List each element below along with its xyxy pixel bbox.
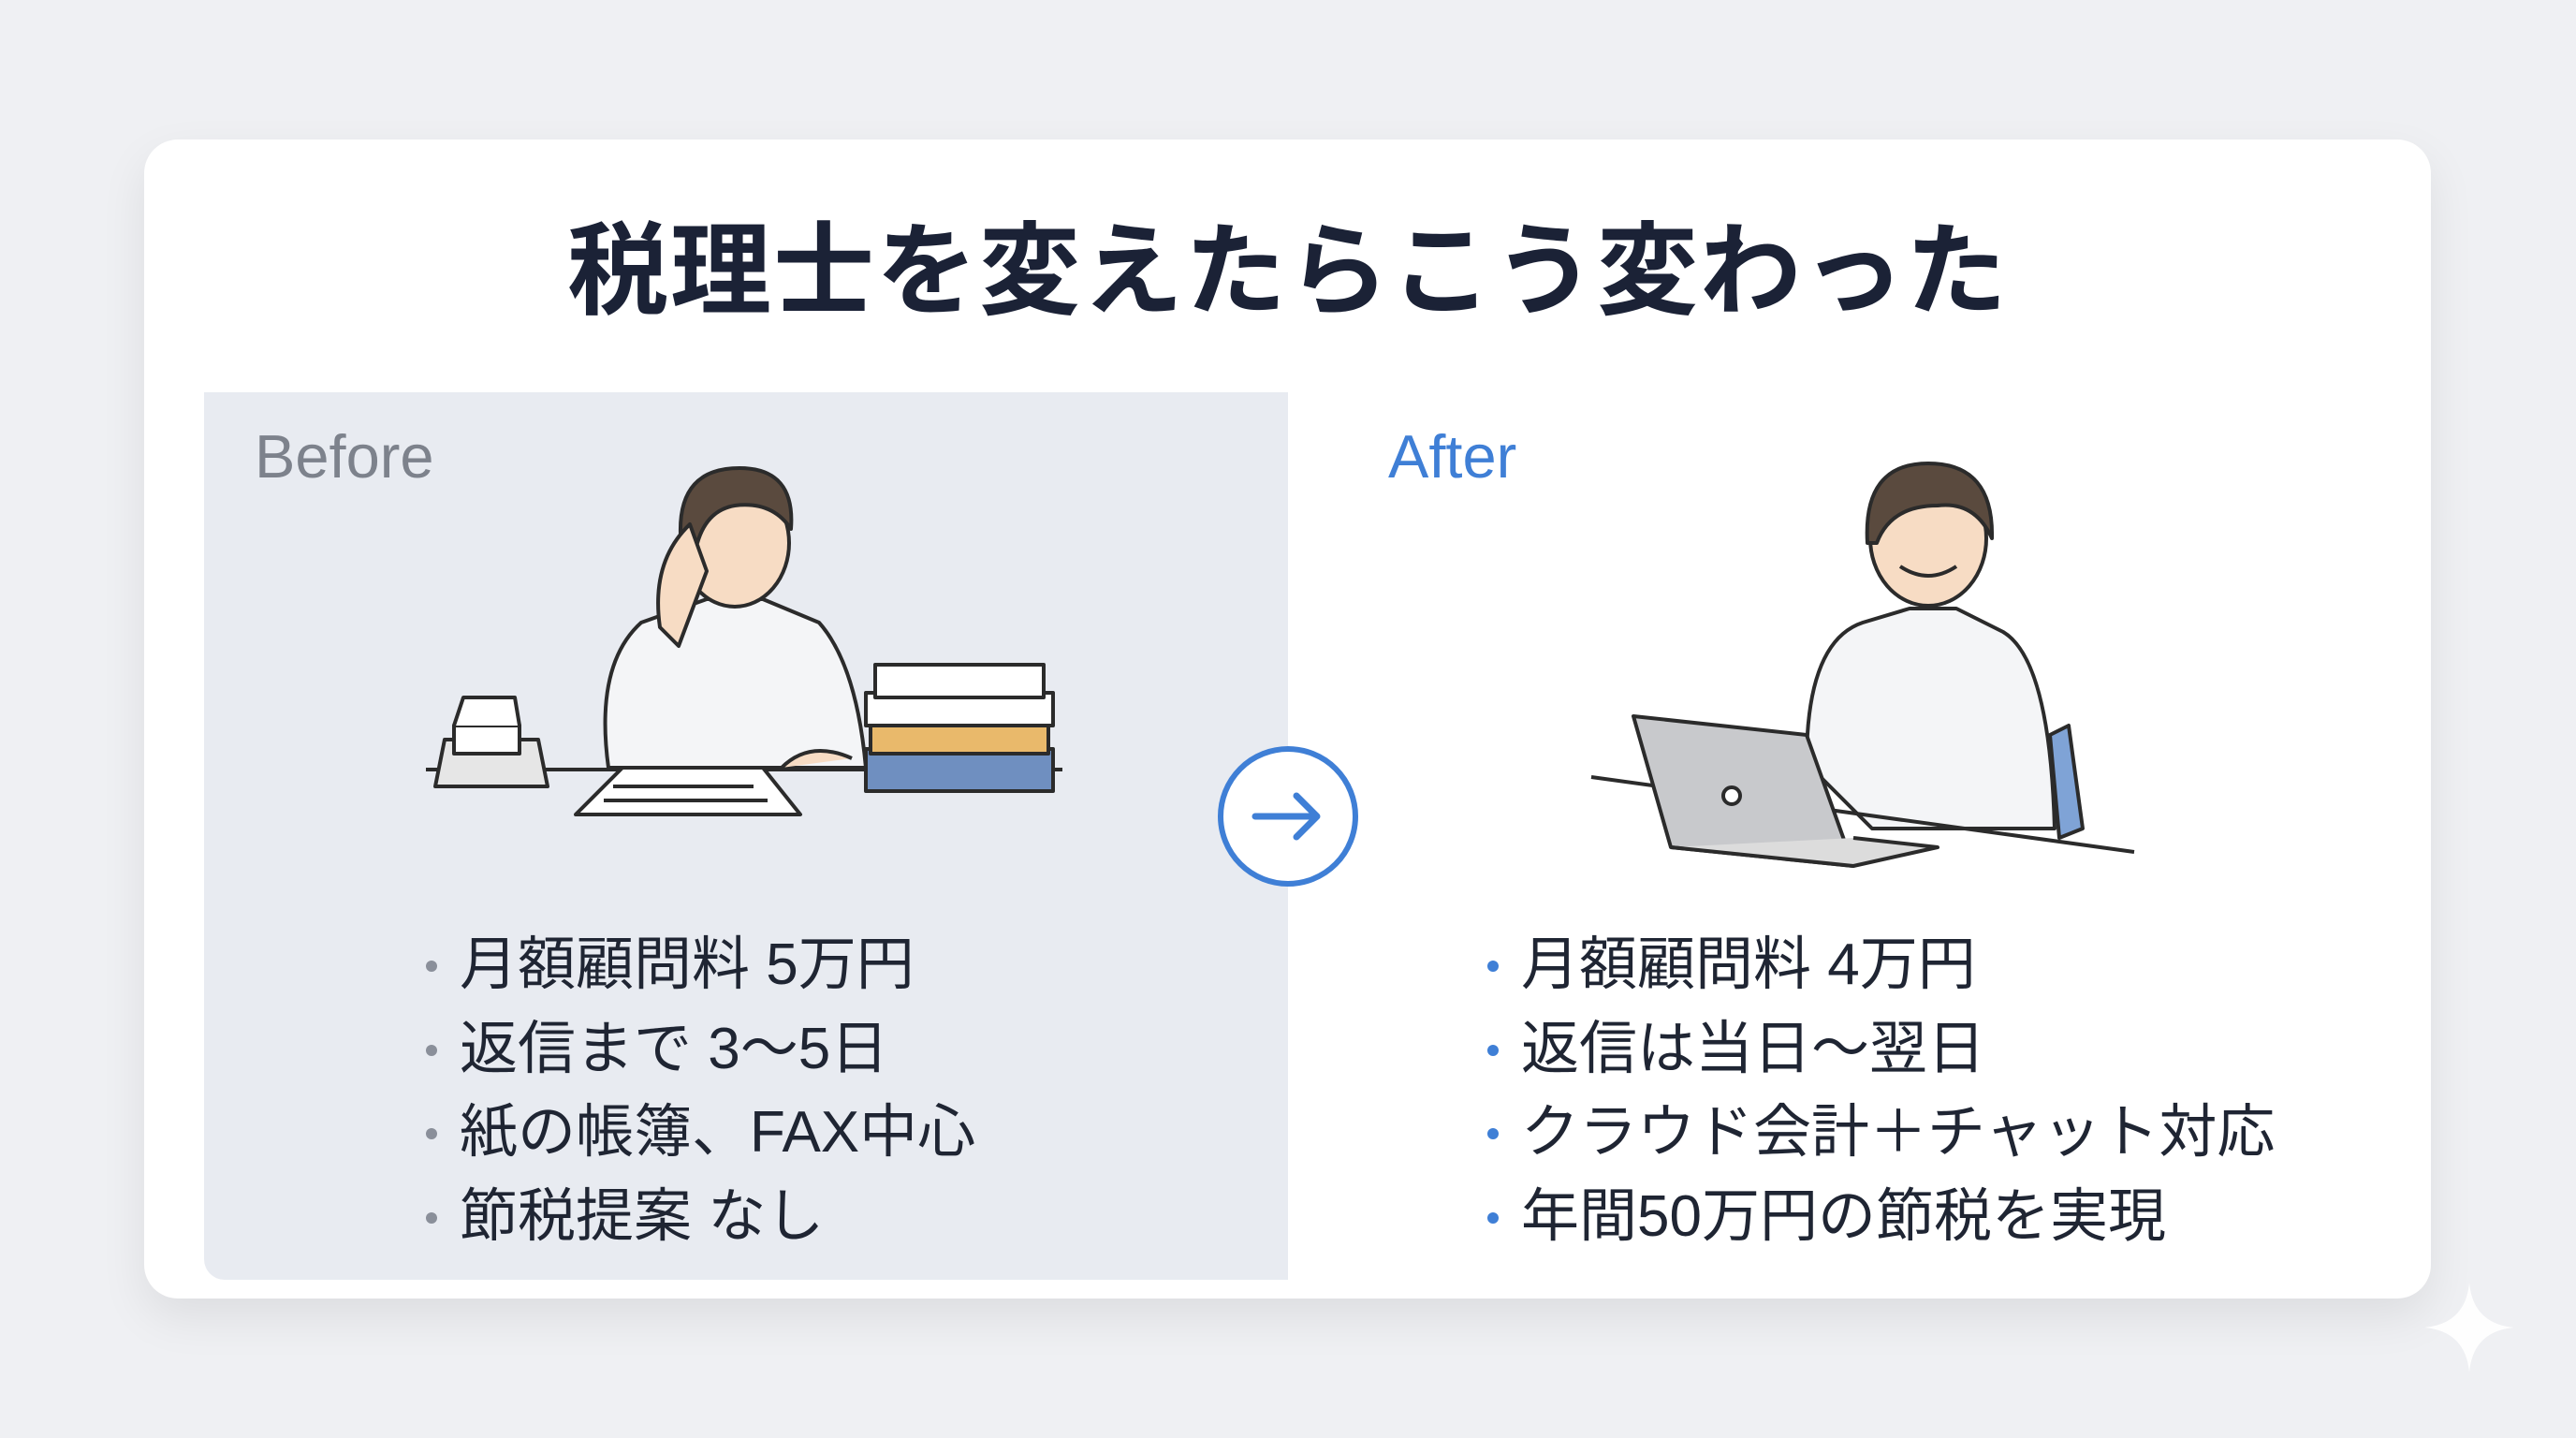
list: before: 節税提案 なし	[460, 1183, 824, 1249]
card	[144, 139, 2431, 1299]
list: after: 年間50万円の節税を実現	[1521, 1183, 2166, 1249]
label: Before: Before	[255, 422, 434, 491]
panel: before background	[204, 392, 1288, 1280]
list: after: 月額顧問料 4万円	[1521, 932, 1976, 997]
list: after: 返信は当日〜翌日	[1521, 1017, 1985, 1080]
arrow circle	[1218, 746, 1358, 887]
list: before: 返信まで 3〜5日	[460, 1017, 888, 1080]
list: before: 月額顧問料 5万円	[460, 932, 915, 997]
list: after: クラウド会計＋チャット対応	[1521, 1100, 2275, 1165]
icon: sparkle	[2426, 1284, 2512, 1371]
list: after	[1487, 932, 2275, 1249]
title: 税理士を変えたらこう変わった	[567, 214, 2009, 328]
illustration: happy man with laptop	[1591, 462, 2134, 868]
label: After: After	[1388, 422, 1516, 491]
list: before	[426, 932, 975, 1249]
illustration: stressed man at desk	[426, 466, 1062, 816]
list: before: 紙の帳簿、FAX中心	[460, 1100, 975, 1165]
